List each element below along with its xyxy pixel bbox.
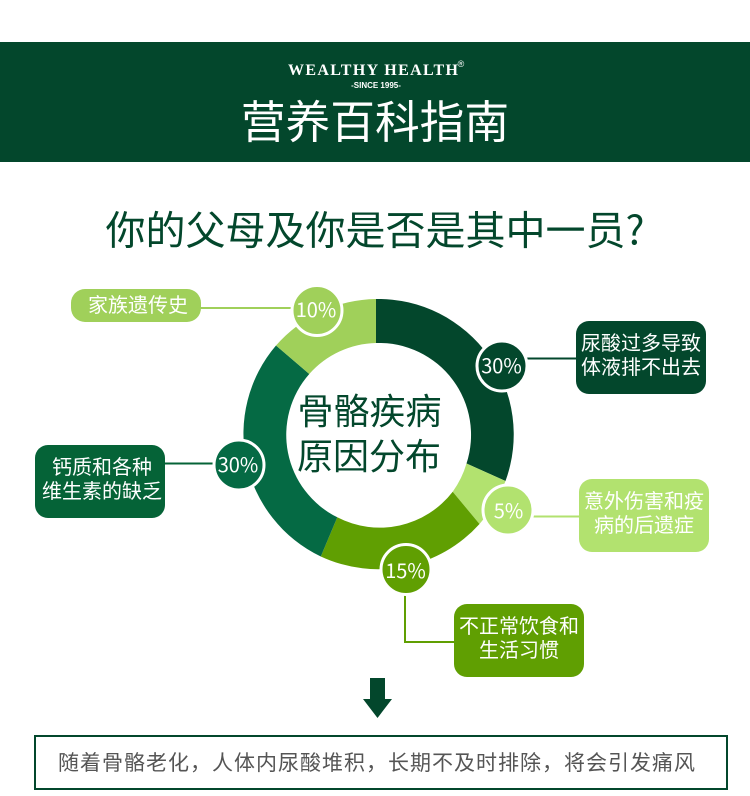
badge: 30% right bbox=[477, 341, 527, 391]
conclusion box bbox=[35, 736, 727, 789]
callout: family history bbox=[71, 289, 295, 322]
callout: calcium deficiency: 钙质和各种 bbox=[52, 451, 152, 480]
brand logo: ® bbox=[458, 59, 465, 69]
callout: injury: 病的后遗症 bbox=[594, 509, 694, 538]
header title: 营养百科指南 bbox=[241, 86, 509, 151]
header band bbox=[0, 42, 750, 162]
callout: injury: 意外伤害和疫 bbox=[584, 485, 704, 514]
callout: calcium deficiency: 维生素的缺乏 bbox=[42, 475, 162, 504]
callout: injury bbox=[530, 479, 709, 552]
arrow: down bbox=[363, 678, 392, 718]
badge: 5%: 5% bbox=[494, 495, 523, 524]
conclusion box: 随着骨骼老化，人体内尿酸堆积，长期不及时排除，将会引发痛风 bbox=[58, 747, 696, 777]
badge: 30% right: 30% bbox=[481, 350, 522, 379]
callout: diet and lifestyle: 生活习惯 bbox=[479, 634, 559, 663]
badge: 5% bbox=[483, 485, 533, 535]
brand logo: WEALTHY HEALTH bbox=[288, 62, 459, 79]
badge: 15%: 15% bbox=[385, 555, 426, 584]
segment: 30% dark green bbox=[376, 299, 514, 481]
badge: 10% bbox=[292, 286, 342, 336]
segment: 10% lime bbox=[276, 299, 376, 374]
segment: 15% green bbox=[321, 492, 480, 569]
badge: 15% bbox=[381, 544, 431, 594]
callout: uric acid: 尿酸过多导致 bbox=[581, 327, 701, 356]
donut chart bbox=[243, 299, 514, 569]
callout: diet and lifestyle bbox=[405, 590, 584, 677]
callout: family history: 家族遗传史 bbox=[88, 289, 188, 318]
badge: 30% left bbox=[214, 440, 264, 490]
callout: calcium deficiency bbox=[35, 445, 220, 518]
callout: diet and lifestyle: 不正常饮食和 bbox=[459, 610, 579, 639]
segment: 5% light green bbox=[453, 464, 506, 524]
callout: uric acid bbox=[525, 321, 706, 394]
badge: 10%: 10% bbox=[296, 294, 336, 323]
donut centre label: 原因分布 bbox=[297, 428, 441, 480]
brand logo bbox=[288, 59, 465, 90]
main question heading: 你的父母及你是否是其中一员? bbox=[106, 198, 644, 256]
segment: 30% mid green bbox=[243, 346, 337, 556]
brand logo: -SINCE 1995- bbox=[351, 81, 401, 90]
donut centre label: 骨骼疾病 bbox=[297, 383, 442, 435]
donut centre label bbox=[297, 383, 442, 480]
badge: 30% left: 30% bbox=[218, 449, 258, 478]
callout: uric acid: 体液排不出去 bbox=[581, 351, 701, 380]
